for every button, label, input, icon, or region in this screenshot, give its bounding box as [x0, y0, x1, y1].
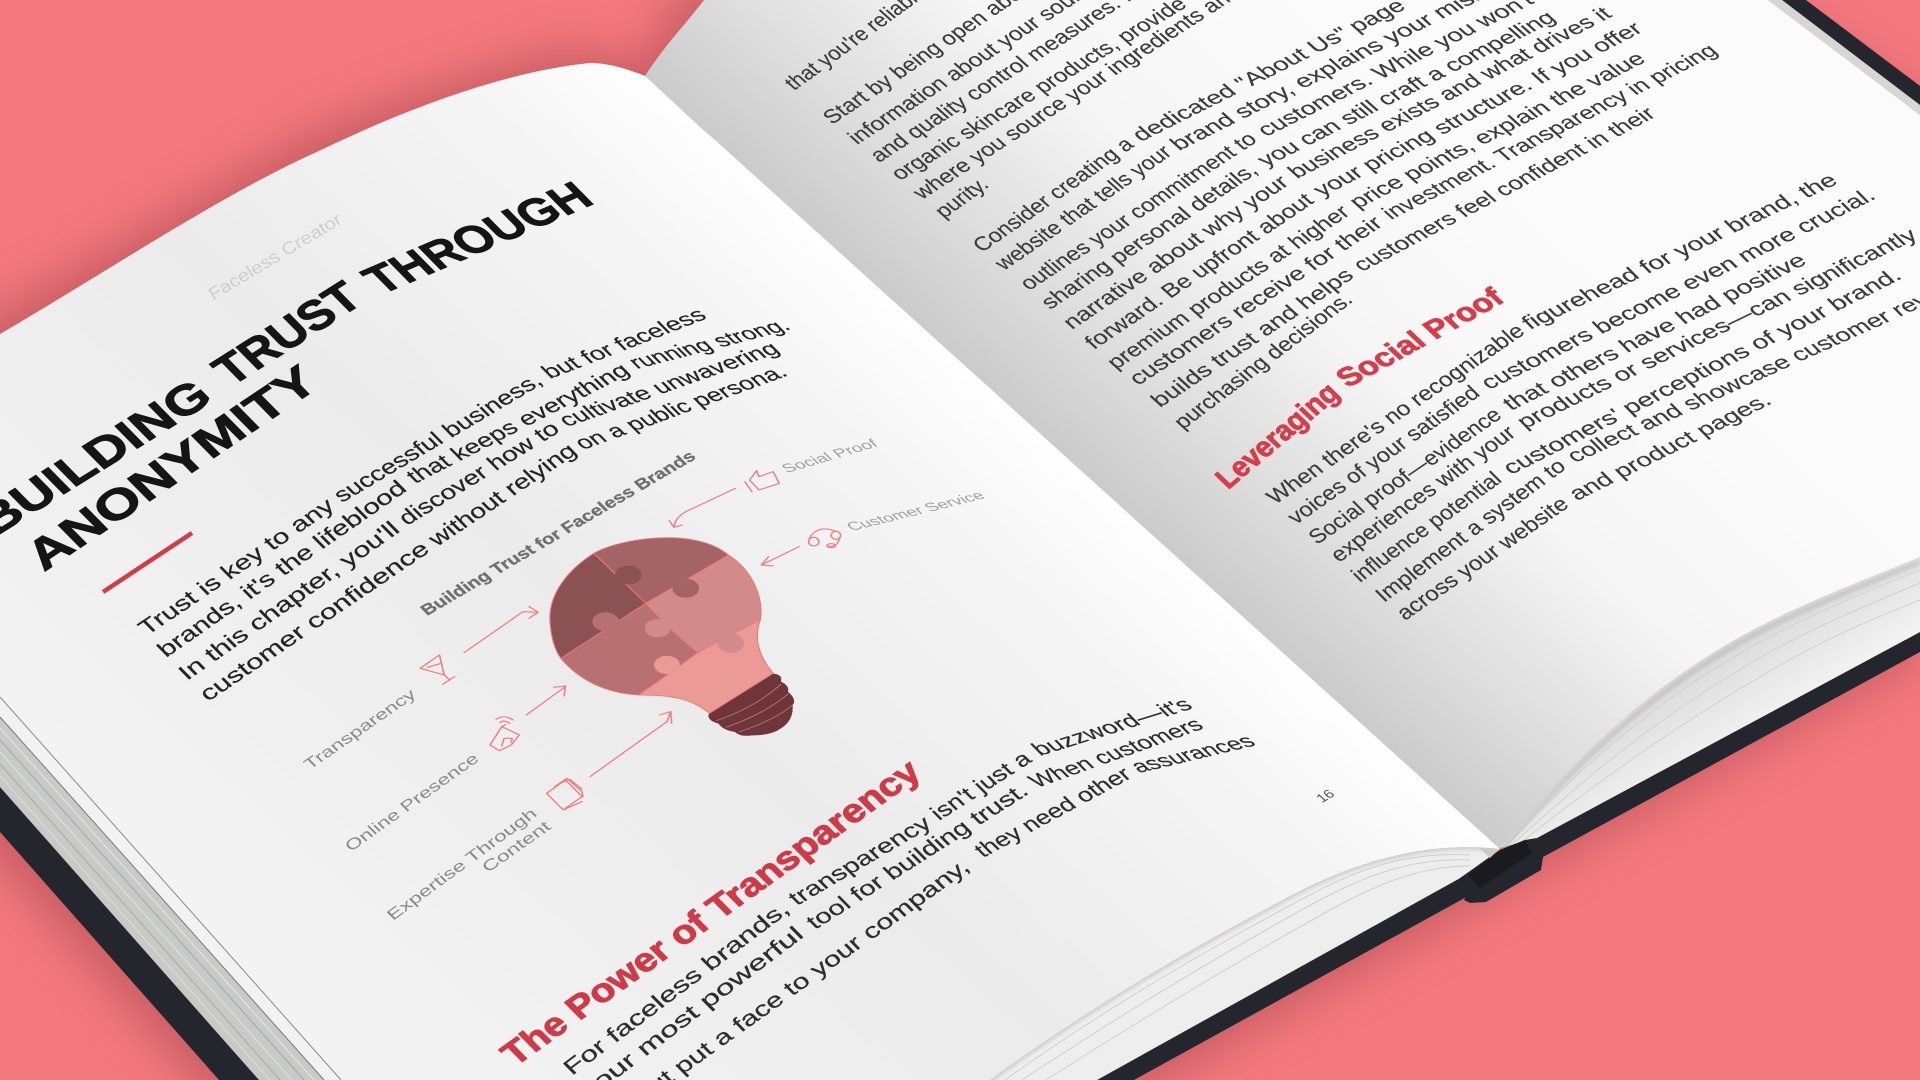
right page about-us paragraph: narrative about why your: [1057, 171, 1294, 333]
left page block: [0, 697, 1500, 1080]
right page about-us paragraph: customers receive for their: [1123, 212, 1388, 389]
diagram: lightbulb puzzle: [550, 538, 794, 735]
red title rule: [103, 533, 192, 592]
intro paragraph: In this chapter, you'll: [173, 517, 405, 685]
diagram labels: [301, 436, 989, 924]
right page about-us paragraph: sharing personal details,: [1035, 159, 1263, 313]
right page top paragraph: Start by being open about your: [817, 0, 1083, 128]
right page about-us paragraph: premium products at higher: [1101, 201, 1355, 373]
diagram labels: Expertise Through: [384, 806, 541, 924]
page number: 16: [1312, 786, 1338, 805]
panel: left page: [0, 63, 1500, 1080]
transparency paragraph: [558, 694, 1260, 1080]
puzzle piece: left: [550, 553, 646, 658]
chapter title: TRUST: [202, 272, 372, 394]
intro paragraph: cultivate unwavering: [553, 338, 785, 431]
icon: house with wifi: [490, 717, 519, 751]
right page about-us paragraph: your pricing structure. If you offer: [1307, 18, 1648, 200]
social proof paragraph: across your website: [1391, 492, 1573, 625]
social proof paragraph: figurehead for your brand, the: [1516, 169, 1843, 334]
arrow: online presence: [526, 686, 565, 715]
intro paragraph: that keeps everything: [401, 359, 635, 488]
right page top paragraph: [779, 0, 1246, 222]
panel: right page: [636, 0, 1920, 858]
chapter title: [0, 173, 603, 579]
puzzle piece: right: [645, 555, 761, 653]
diagram labels: Transparency: [301, 687, 420, 773]
right page top paragraph: purity.: [929, 173, 994, 222]
diagram labels: Online Presence: [342, 751, 483, 855]
right page about-us paragraph: outlines your commitment to: [1014, 128, 1262, 294]
spine headband: [1460, 838, 1543, 903]
puzzle piece: bottom left: [561, 603, 698, 695]
running header: Faceless Creator: [203, 210, 348, 303]
transparency paragraph: For faceless brands,: [558, 897, 795, 1080]
right page top paragraph: that you're reliable: [779, 0, 932, 94]
right page about-us paragraph: customers. While you won't be: [1251, 0, 1570, 140]
right page about-us paragraph: builds trust and helps: [1145, 264, 1359, 411]
arrow: transparency: [464, 607, 538, 653]
right page top paragraph: organic skincare products, provide: [885, 0, 1192, 184]
intro paragraph: Trust is key to any: [133, 493, 340, 640]
social proof paragraph: Implement a system to: [1370, 454, 1571, 607]
right page about-us paragraph: brand story, explains your mission: [1164, 0, 1522, 154]
intro paragraph: discover how to: [393, 417, 564, 530]
section heading: leveraging social proof: Leveraging: [1209, 377, 1346, 495]
diagram labels: Content: [479, 818, 555, 876]
social proof paragraph: customers become even more crucial.: [1475, 184, 1881, 394]
right page block: [1500, 557, 1920, 848]
top right page block: [1768, 0, 1920, 115]
diagram heading: Building Trust for Faceless Brands: [417, 447, 700, 619]
intro paragraph: [133, 304, 796, 706]
icon: cocktail glass: [420, 655, 455, 684]
chapter title: THROUGH: [352, 173, 603, 302]
intro paragraph: successful business,: [328, 369, 547, 507]
transparency paragraph: tool for building trust.: [801, 779, 1034, 934]
intro paragraph: brands, it's the lifeblood: [152, 476, 412, 662]
diagram labels: Customer Service: [843, 489, 989, 534]
diagram labels: Social Proof: [778, 436, 883, 476]
social proof paragraph: influence potential: [1346, 467, 1507, 587]
right page about-us paragraph: forward. Be upfront about: [1079, 189, 1319, 353]
right page about-us paragraph: price points, explain the value: [1343, 48, 1651, 212]
arrow: customer service: [761, 547, 799, 566]
section heading: leveraging social proof: [1209, 283, 1512, 495]
right page about-us paragraph: investment. Transparency in pricing: [1376, 40, 1723, 223]
puzzle piece: bottom right: [639, 619, 773, 713]
social proof paragraph: experiences with your: [1325, 421, 1521, 567]
icon: book: [547, 778, 583, 810]
right page about-us paragraph: customers feel confident in their: [1347, 103, 1661, 275]
icon: headset: [809, 529, 841, 548]
intro paragraph: without relying: [422, 439, 582, 551]
intro paragraph: but for faceless: [536, 304, 712, 383]
transparency paragraph: they need other: [969, 763, 1137, 862]
section heading: the power of transparency: The Power of Transparency: [493, 753, 929, 1073]
social proof paragraph: When there's no recognizable: [1261, 319, 1529, 509]
social proof paragraph: Social proof—evidence: [1303, 403, 1507, 549]
social proof paragraph: products or services—can significantly: [1511, 224, 1920, 433]
transparency paragraph: transparency: [783, 811, 937, 910]
icon: thumbs up: [745, 471, 779, 492]
right page about-us paragraph: [967, 0, 1723, 433]
intro paragraph: running strong.: [623, 315, 796, 373]
right page about-us paragraph: you can still craft a compelling: [1251, 7, 1561, 170]
right page about-us paragraph: purchasing decisions.: [1168, 288, 1358, 433]
section heading: leveraging social proof: Social Proof: [1329, 283, 1512, 393]
puzzle piece: top: [594, 538, 728, 603]
transparency paragraph: When customers: [1023, 714, 1208, 792]
right page about-us paragraph: website that tells your: [988, 141, 1177, 275]
social proof paragraph: [1261, 169, 1920, 625]
right page top paragraph: where you source your ingredients and: [906, 0, 1246, 204]
chapter title: ANONYMITY: [15, 356, 328, 579]
diagram arrows and icons: [420, 471, 841, 810]
intro paragraph: on a public persona.: [569, 361, 792, 454]
page edge line: [0, 697, 341, 1080]
right page top paragraph: and quality control measures. If you: [864, 0, 1177, 166]
right page top paragraph: information about your sourcing: [842, 0, 1121, 148]
social proof paragraph: voices of your satisfied: [1282, 381, 1485, 529]
right page about-us paragraph: dedicated "About Us" page: [1126, 0, 1411, 145]
arrow: social proof: [669, 488, 735, 527]
social proof paragraph: collect and showcase customer reviews: [1561, 268, 1920, 467]
transparency paragraph: assurances: [1125, 731, 1260, 777]
transparency paragraph: buzzword—it's: [1026, 694, 1197, 760]
social proof paragraph: and product pages.: [1563, 389, 1776, 505]
transparency paragraph: isn't just a: [925, 747, 1037, 825]
right page about-us paragraph: Consider creating a: [967, 132, 1139, 256]
intro paragraph: customer confidence: [194, 537, 435, 706]
social proof paragraph: that others have had positive: [1497, 249, 1812, 415]
right page about-us paragraph: business exists and what drives it: [1282, 3, 1617, 182]
bulb screw base: [709, 674, 794, 735]
social proof paragraph: customers' perceptions of your brand.: [1497, 264, 1907, 479]
arrow: expertise: [590, 712, 672, 777]
